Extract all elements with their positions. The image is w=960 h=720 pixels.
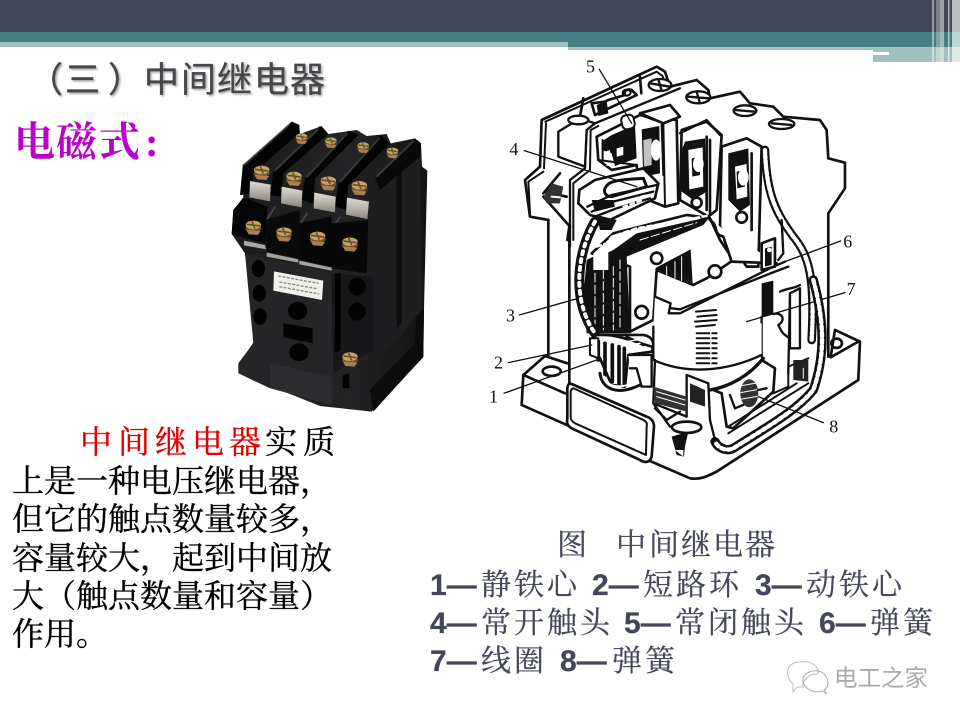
contact bridge [543,168,658,230]
pole 1 contact block [597,105,680,207]
mounting holes [252,260,366,388]
body paragraph: 上是一种电压继电器， [12,463,332,499]
upper ribs [240,122,299,195]
body paragraph: 大（触点数量和容量） [12,578,332,614]
part numbers: 2 [494,352,503,372]
rib highlights [233,124,414,227]
leader lines [504,69,841,423]
body paragraph [12,424,335,652]
figure caption and legend: 静铁心 [481,569,578,602]
pole 2 contact block [680,120,722,217]
icon: chat bubbles [788,662,828,694]
figure caption and legend: 弹簧 [612,645,677,678]
watermark: WeChat icon and account name [788,662,928,694]
body paragraph: 作用。 [12,616,108,652]
figure caption and legend: 7— [430,645,477,678]
housing outline [525,67,845,357]
figure caption and legend: 6— [819,607,866,640]
nameplate [273,271,323,300]
figure caption and legend: 常闭触头 [675,607,805,640]
brass screws [254,166,270,180]
figure caption and legend: 动铁心 [806,569,903,602]
figure caption and legend: 5— [624,607,671,640]
core lower [590,335,653,390]
first pole shell line [570,88,680,247]
body paragraph: 实质 [265,424,335,460]
screw [672,422,701,433]
enclosure band [715,280,822,450]
part numbers: 3 [506,306,515,326]
figure caption and legend: 图中间继电器 [557,529,775,562]
figure caption and legend: 8— [560,645,607,678]
part numbers [489,56,856,436]
part numbers: 6 [843,231,852,251]
armature yoke [583,215,777,333]
part numbers: 4 [509,139,518,159]
front face [245,253,333,373]
lower mechanism [653,360,715,440]
spring holder [762,238,775,270]
upper terminal screws [558,79,794,167]
figure caption and legend: 常开触头 [481,607,611,640]
figure caption and legend: 弹簧 [870,607,935,640]
figure caption and legend: 短路环 [643,569,740,602]
base outline [522,330,860,479]
relay body [232,122,427,412]
photo: relay product [232,122,427,412]
coil body [653,262,845,373]
cutaway diagram of relay [489,56,860,479]
base block [238,343,335,403]
lower contact wells [232,197,267,243]
right insulating band [765,150,813,340]
label plate [567,384,654,462]
part numbers: 1 [489,386,498,406]
figure caption and legend: 1— [430,569,477,602]
body paragraph: 中间继电器 [80,424,261,460]
silver contact plates [249,181,271,201]
figure caption and legend: 3— [755,569,802,602]
title: （三）中间继电器 [28,61,325,100]
header band [0,0,960,64]
contact mass [602,125,637,166]
body paragraph: 但它的触点数量较多， [12,501,332,537]
account name: 电工之家 [834,665,928,691]
left insulating band [579,222,595,333]
part numbers: 7 [847,279,856,299]
figure caption and legend: 4— [430,607,477,640]
body paragraph: 容量较大，起到中间放 [12,540,332,576]
figure caption and legend: 线圈 [481,645,544,678]
pole 3 contact block [720,138,762,267]
figure caption and legend: 2— [592,569,639,602]
part numbers: 5 [586,56,595,76]
figure caption and legend [430,529,935,678]
black window [655,249,693,283]
subheading: electromagnetic type: 电磁式: [14,119,159,165]
coil lower [653,323,762,370]
part numbers: 8 [829,416,838,436]
